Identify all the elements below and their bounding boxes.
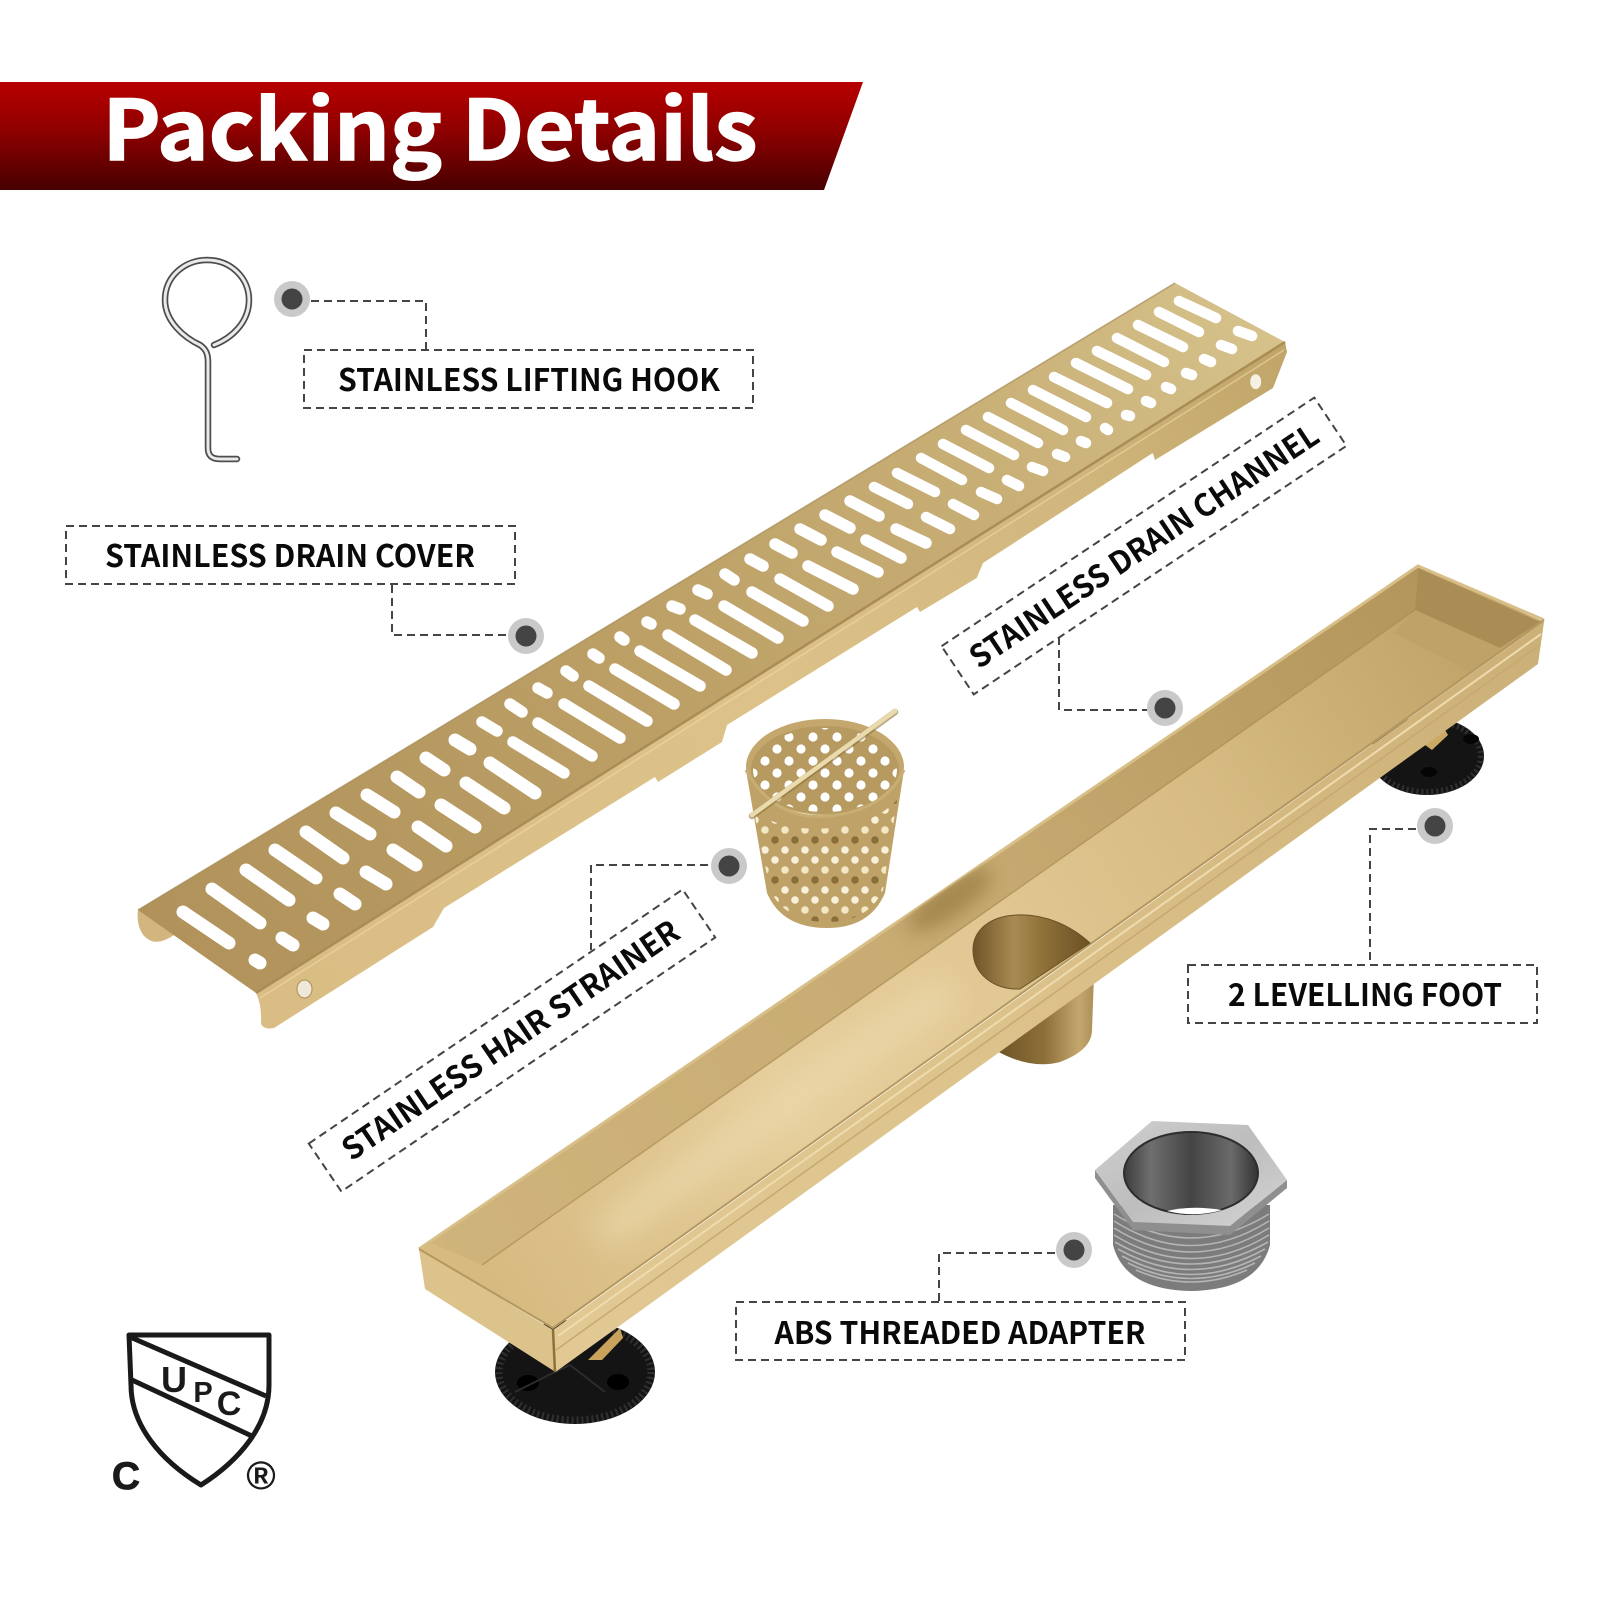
drain cover: [138, 283, 1287, 1028]
icon: cUPC certification shield: [112, 1335, 276, 1498]
icon: stainless lifting hook: [165, 260, 249, 459]
icon: ABS threaded adapter: [1095, 1121, 1287, 1291]
hair strainer: [746, 711, 904, 928]
label: threaded adapter: ABS THREADED ADAPTER: [774, 1308, 1146, 1353]
drain channel: [419, 566, 1544, 1372]
icon: cUPC certification shield: C: [112, 1455, 140, 1498]
icon: cUPC certification shield: ®: [246, 1454, 276, 1498]
label: lifting hook: STAINLESS LIFTING HOOK: [338, 355, 721, 400]
label: levelling foot: 2 LEVELLING FOOT: [1228, 970, 1502, 1015]
label: drain cover: STAINLESS DRAIN COVER: [105, 531, 475, 576]
icon: cUPC certification shield: P: [193, 1377, 213, 1409]
drain cover slots: [183, 301, 1252, 963]
icon: cUPC certification shield: U: [161, 1359, 187, 1400]
levelling foot: front: [495, 1320, 655, 1424]
channel drain hole: [973, 915, 1090, 989]
callout: levelling foot: [1188, 808, 1537, 1023]
title banner: [0, 64, 863, 190]
levelling foot: back: [1370, 717, 1484, 795]
callout: hair strainer: [309, 848, 747, 1192]
drain outlet pipe: [995, 975, 1094, 1064]
title: Packing Details: [102, 64, 758, 184]
label: hair strainer: STAINLESS HAIR STRAINER: [331, 907, 687, 1169]
callout: lifting hook: [274, 281, 753, 408]
callout: threaded adapter: [736, 1232, 1185, 1360]
label: drain channel: STAINLESS DRAIN CHANNEL: [959, 411, 1326, 677]
callout: drain cover: [66, 526, 544, 654]
callout: drain channel: [942, 398, 1346, 726]
icon: cUPC certification shield: C: [217, 1385, 241, 1423]
